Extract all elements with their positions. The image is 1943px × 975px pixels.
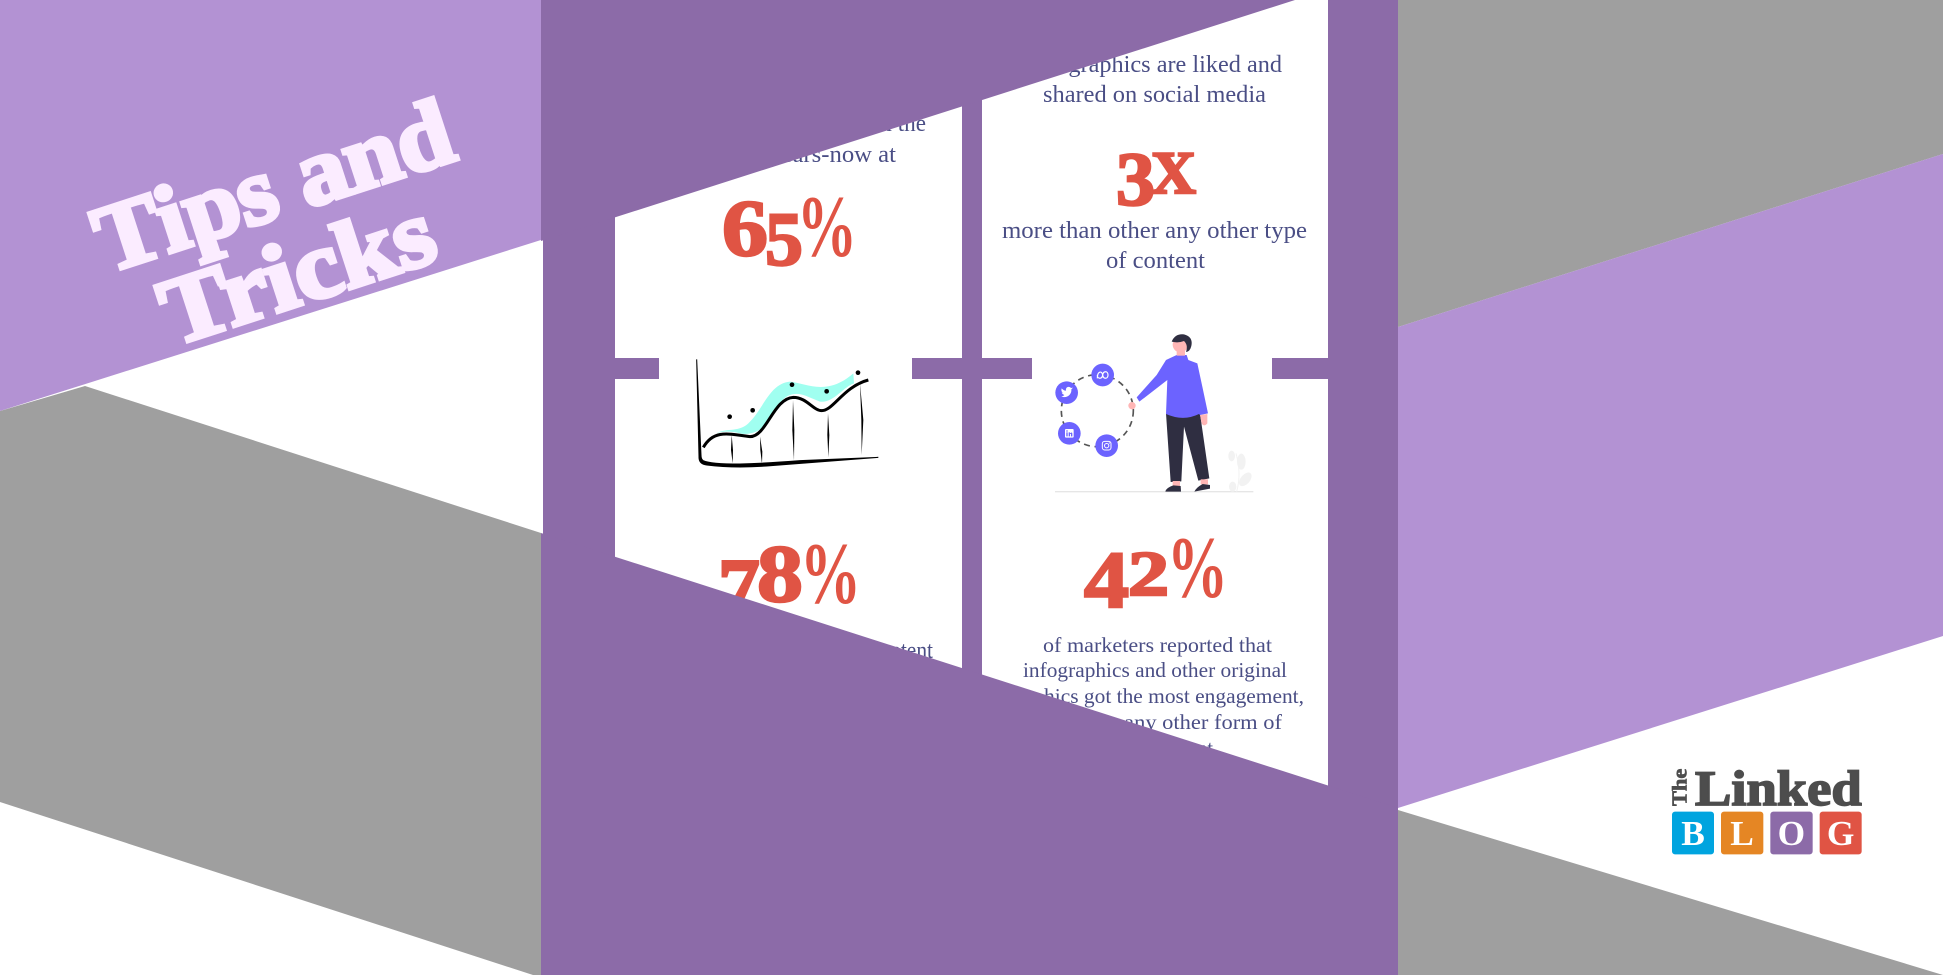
text: marketers paragraph: infographics and other original xyxy=(1023,658,1287,682)
text: marketers paragraph: more than any other form of xyxy=(1028,710,1282,734)
panel: grey band left xyxy=(0,386,541,975)
text: marketers paragraph: graphics got the most engagement, xyxy=(1006,684,1304,708)
text: intro lines xyxy=(1028,52,1282,108)
text: marketers paragraph xyxy=(1006,633,1304,760)
stat: 78%: 8 xyxy=(757,528,803,619)
panel: purple top wedge xyxy=(541,0,1295,241)
tick bar left xyxy=(615,358,659,379)
title: Tricks xyxy=(147,178,448,366)
panel: lilac band right xyxy=(1398,154,1943,808)
panel: lilac top left band xyxy=(0,0,541,411)
panel: purple bottom wedge xyxy=(541,533,1398,975)
text: intro lines: Infographics are liked and xyxy=(1028,52,1282,78)
logo: The Linked Blog: O xyxy=(1778,814,1805,853)
stat: 3X: X xyxy=(1151,140,1196,206)
stat: 65%: 5 xyxy=(765,198,803,282)
logo: The Linked Blog: G xyxy=(1827,814,1854,853)
stat: 42%: 2 xyxy=(1128,539,1169,609)
text: intro lines xyxy=(650,111,926,168)
title: Tips and xyxy=(81,78,465,293)
panel: right column xyxy=(982,0,1328,800)
stat: 78%: 7 xyxy=(718,544,760,632)
logo: The Linked Blog: Linked xyxy=(1695,760,1862,816)
stat: 3X: 3 xyxy=(1116,138,1155,222)
text: marketers paragraph: of marketers reported that xyxy=(1043,633,1272,657)
stat: 42%: % xyxy=(1167,520,1228,617)
tick bar left xyxy=(982,358,1032,379)
text: comparison lines: of content xyxy=(1106,248,1205,274)
icon: person with social media ring xyxy=(1055,334,1254,492)
logo: The Linked Blog: L xyxy=(1730,814,1754,853)
panel: purple central frame xyxy=(543,0,1398,975)
stat: 65%: % xyxy=(797,179,857,276)
logo: The Linked Blog: B xyxy=(1681,814,1705,853)
text: content line: of people rely on visual content xyxy=(662,638,933,664)
stat: 42%: 4 xyxy=(1084,537,1129,625)
logo: The Linked Blog: The xyxy=(1670,769,1692,806)
panel: grey band top right xyxy=(1398,0,1943,327)
text: intro lines: shared on social media xyxy=(1043,82,1266,108)
panel: grey band bottom right xyxy=(1398,810,1943,975)
text: intro lines: past few years-now at xyxy=(680,142,896,168)
text: intro lines: Use of visuals has risen in the xyxy=(650,111,926,137)
tick bar right xyxy=(912,358,962,379)
logo: The Linked Blog xyxy=(1670,760,1862,854)
text: marketers paragraph: visual content xyxy=(1097,736,1213,760)
tick bar right xyxy=(1272,358,1328,379)
text: comparison lines: more than other any other type xyxy=(1002,218,1307,244)
stat: 65%: 6 xyxy=(722,185,768,273)
text: comparison lines xyxy=(1002,218,1307,274)
stat: 78%: % xyxy=(800,526,861,623)
icon: line chart sketch xyxy=(697,359,878,467)
panel: left column xyxy=(615,0,962,700)
